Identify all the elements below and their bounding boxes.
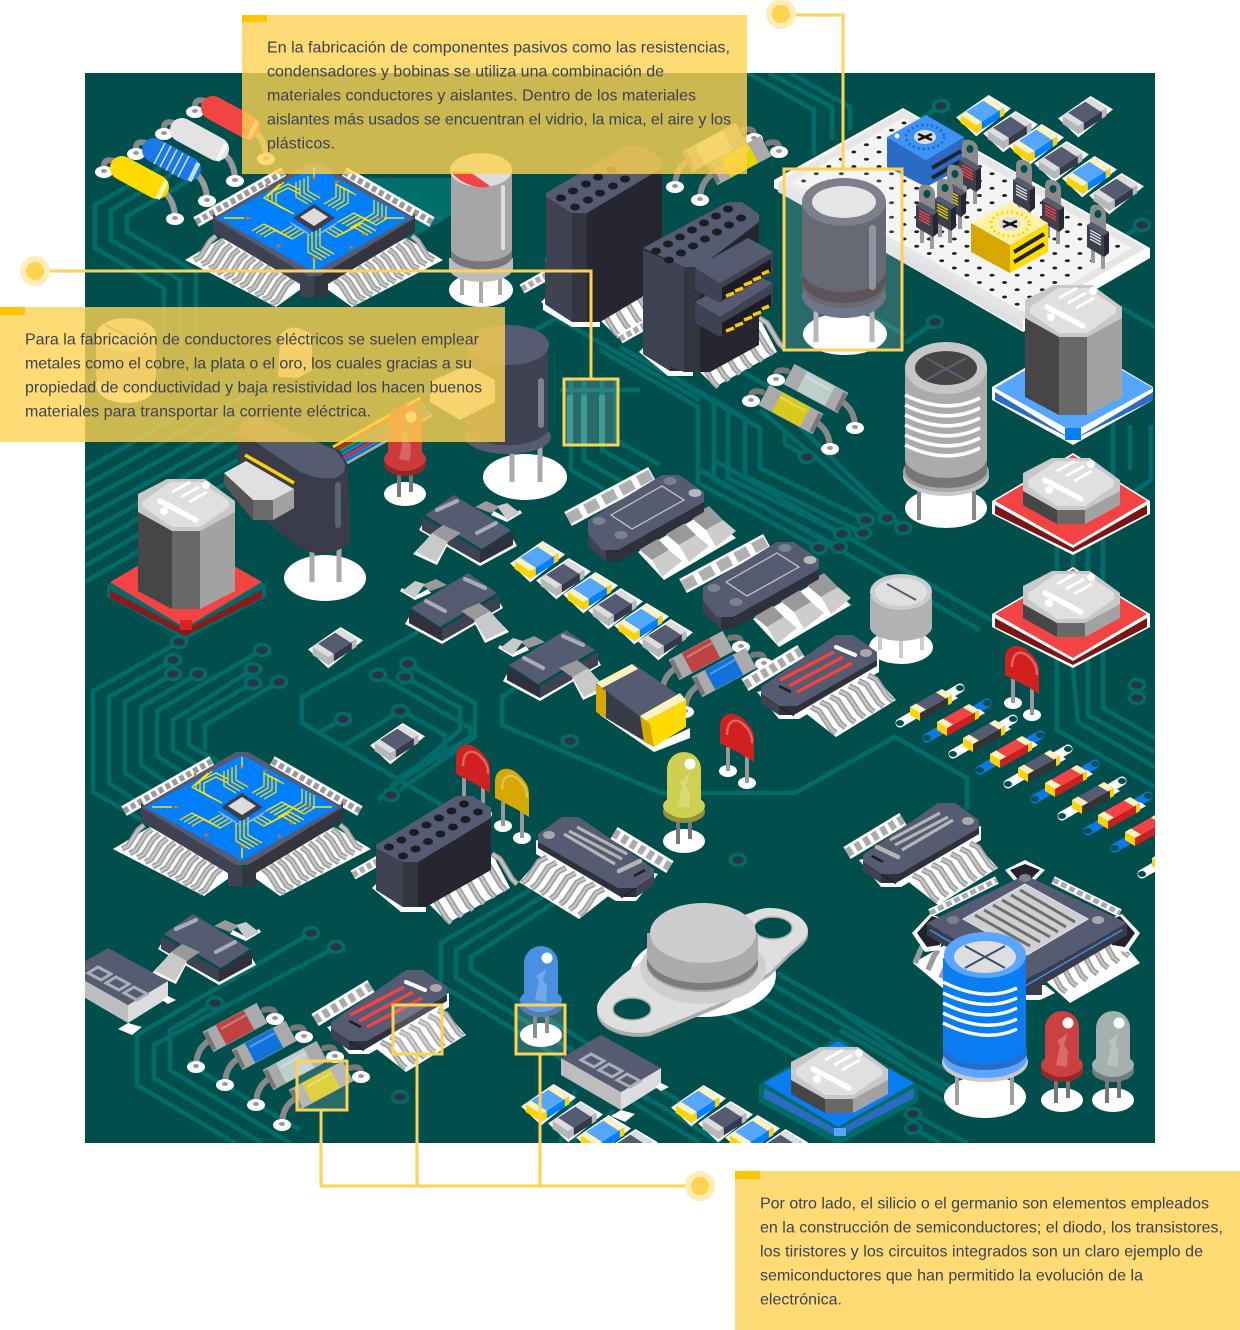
red LED, bottom right	[1041, 1011, 1083, 1112]
blue coil capacitor	[942, 932, 1028, 1118]
blue and dark SMD row, centre	[510, 541, 693, 660]
red and blue resistors, centre	[653, 637, 773, 718]
blue trimmer	[887, 115, 964, 187]
small SMD parts, left	[308, 627, 425, 764]
large SMD with yellow ends	[596, 664, 690, 752]
panel: semiconductores: electrónica.	[760, 1292, 842, 1308]
seven-segment display, bottom centre	[561, 1035, 669, 1122]
connector block bottom	[353, 796, 517, 923]
panel: aislantes y componentes pasivos: condensadores y bobinas se utiliza una combinación de	[267, 64, 664, 80]
highlight: aislante capacitor box	[784, 169, 902, 350]
panel: semiconductores: los tiristores y los circuitos integrados son un claro ejemplo de	[760, 1244, 1203, 1260]
SOT transistors	[400, 495, 607, 701]
inductor on red base, lower	[992, 567, 1150, 668]
power transistors	[568, 474, 851, 647]
inductor chip on blue base, bottom	[759, 1037, 918, 1145]
panel: aislantes y componentes pasivos: En la fabricación de componentes pasivos como las resistencias,	[267, 40, 730, 56]
panel: conductores de texto sobre la placa: propiedad de conductividad y baja resistividad los hacen buenos	[25, 380, 482, 396]
microchip with blue die, bottom	[113, 752, 371, 896]
large socket chip	[912, 860, 1140, 1003]
vias	[166, 100, 1150, 1134]
SMD parts along the bottom edge	[521, 1084, 808, 1170]
highlighted connector pins box content	[570, 395, 602, 446]
panel: aislantes y componentes pasivos: plásticos.	[267, 136, 335, 152]
inductor on red base, upper	[992, 453, 1150, 555]
panel: conductores de texto sobre la placa: Para la fabricación de conductores eléctricos se suelen emplear	[25, 332, 480, 348]
callout: highlight boxes and connector lines	[35, 15, 902, 1186]
small lead under text panel	[278, 328, 312, 378]
panel: conductores de texto sobre la placa: materiales para transportar la corriente eléctrica.	[25, 404, 371, 420]
axial resistors bottom left	[187, 1009, 370, 1131]
round trimmer right	[869, 574, 933, 664]
tiny resistor array	[896, 684, 1155, 878]
inductor on blue base	[992, 285, 1153, 445]
highlight: semiconductor chip box	[393, 1005, 442, 1054]
highlighted dark capacitor	[802, 178, 887, 355]
chip with red stripes, centre	[745, 635, 896, 737]
panel: semiconductores: Por otro lado, el silicio o el germanio son elementos empleados	[760, 1196, 1209, 1212]
ribbon connector with white block	[224, 365, 495, 601]
small transistors on breadboard	[916, 140, 1109, 269]
arrow line: bottom	[321, 1055, 700, 1186]
highlight: semiconductor LED box	[516, 1005, 565, 1054]
glass and yellow resistors, centre	[742, 370, 864, 455]
axial resistors: red, white, blue, yellow	[95, 100, 275, 225]
dark capacitor with leads, centre	[465, 325, 567, 500]
circuit board	[68, 73, 1206, 1170]
panel: conductores de texto sobre la placa: metales como el cobre, la plata o el oro, los cuales gracias a su	[25, 356, 472, 372]
silver coil capacitor	[903, 342, 989, 528]
panel: conductores de texto sobre la placa	[0, 307, 505, 442]
panel: aislantes y componentes pasivos: materiales conductores y aislantes. Dentro de los materiales	[267, 88, 696, 104]
microchip with blue die, top	[185, 163, 443, 307]
panel: semiconductores: semiconductores que han permitido la evolución de la	[760, 1268, 1143, 1284]
disc capacitors red and yellow	[455, 745, 531, 844]
metal can transistor	[597, 903, 808, 1037]
grey LED, bottom right	[1092, 1011, 1134, 1112]
red LED, centre-left	[384, 405, 426, 506]
PCB traces	[85, 73, 1155, 1143]
SMD components row on the right	[956, 95, 1144, 214]
panel: aislantes y componentes pasivos	[242, 15, 747, 174]
double connector block	[620, 202, 784, 387]
arrow line: top right	[781, 15, 843, 168]
connector block tall	[520, 146, 662, 339]
round trimmer under text panel	[96, 318, 156, 403]
highlight: semiconductor diode box	[297, 1061, 347, 1110]
glass and yellow resistors, top	[666, 129, 788, 206]
panel: semiconductores: en la construcción de semiconductores; el diodo, los transistores,	[760, 1220, 1223, 1236]
electrolytic capacitor grey, top	[449, 153, 513, 307]
highlight: conductor pins box	[564, 379, 618, 445]
marker dots	[20, 0, 796, 1201]
red disc capacitors	[719, 646, 1041, 789]
chip with red stripes, bottom	[315, 970, 466, 1072]
arrow line: left	[35, 271, 591, 378]
grey stripe chips	[519, 803, 998, 919]
inductor on red base, left	[107, 479, 266, 640]
blue LED	[520, 946, 562, 1047]
panel: semiconductores	[735, 1171, 1240, 1330]
SOT transistor and seven-segment display, bottom left	[68, 914, 261, 1035]
perforated breadboard	[774, 108, 1150, 332]
panel: aislantes y componentes pasivos: aislantes más usados se encuentran el vidrio, la mica, el aire y los	[267, 112, 731, 128]
yellow trimmer	[971, 202, 1048, 273]
yellow LED	[663, 752, 705, 853]
